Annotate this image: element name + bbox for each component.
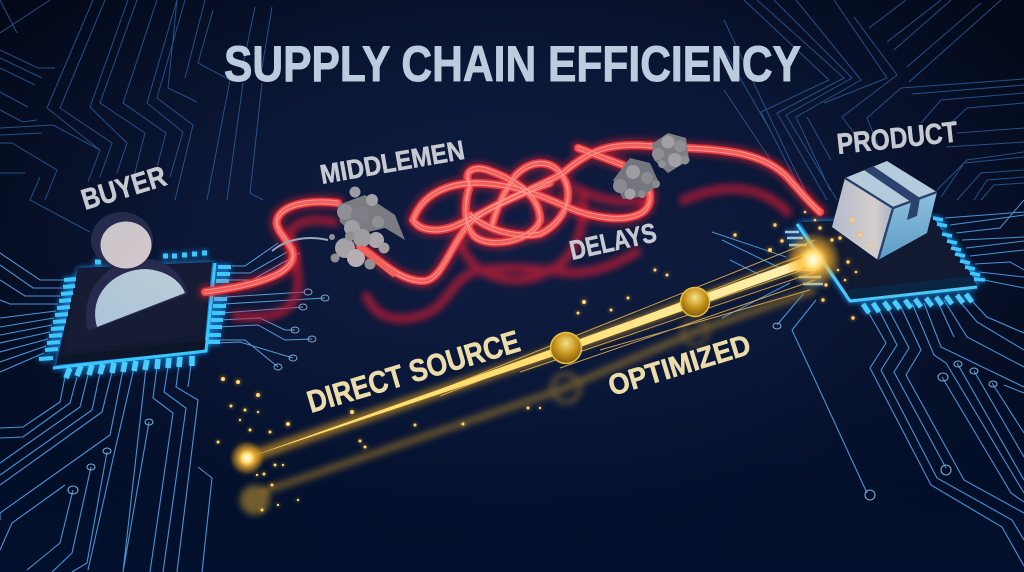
- circuit traces: buyer chip right: [208, 243, 329, 370]
- red line strand: [205, 147, 820, 294]
- chip pins right: [208, 267, 231, 342]
- label: product: PRODUCT: [835, 116, 959, 161]
- golden orb: [550, 332, 582, 364]
- chip pins top: [95, 253, 207, 262]
- golden orb: [680, 288, 710, 316]
- golden reflection flare: [240, 485, 270, 515]
- label: optimized: OPTIMIZED: [605, 329, 755, 403]
- spark: product end: [733, 211, 871, 320]
- golden glow: [247, 258, 815, 458]
- circuit traces: product chip lower: [68, 293, 1024, 566]
- label: middlemen: MIDDLEMEN: [318, 135, 467, 190]
- spark: buyer end: [216, 268, 668, 512]
- red path reflection: [232, 189, 790, 319]
- red line strand: [205, 143, 820, 290]
- icon: product box: [832, 161, 937, 260]
- title: SUPPLY CHAIN EFFICIENCY: [224, 36, 801, 92]
- tangled red supply line: [205, 143, 820, 294]
- product chip pins bottom: [863, 294, 972, 313]
- circuit traces: upper left: [0, 0, 272, 232]
- product chip pins right: [933, 218, 985, 280]
- golden direct path: [247, 240, 817, 458]
- middleman blockage: centre cluster: [613, 158, 660, 200]
- golden beam: [247, 254, 817, 458]
- chip pins left: [39, 279, 76, 359]
- chip: buyer: [39, 253, 231, 378]
- red line core: [205, 145, 820, 292]
- circuit traces: product chip right: [712, 200, 1024, 318]
- circuit traces: buyer chip left and lower: [0, 253, 212, 572]
- chip pins bottom: [66, 356, 192, 378]
- middleman blockage: right cluster: [652, 133, 690, 173]
- chip: product: [785, 217, 985, 313]
- red line glow: [205, 145, 820, 292]
- golden strands: [430, 240, 815, 396]
- golden reflection: [262, 290, 815, 492]
- circuit traces: upper right: [724, 0, 1024, 210]
- red line tube: [205, 145, 820, 292]
- label: buyer: BUYER: [78, 161, 170, 217]
- icon: buyer person: [86, 212, 188, 331]
- product chip pins left: [785, 232, 823, 284]
- label: direct source: DIRECT SOURCE: [303, 324, 524, 420]
- label: delays: DELAYS: [567, 218, 659, 266]
- middleman blockage: left cluster: [272, 186, 405, 275]
